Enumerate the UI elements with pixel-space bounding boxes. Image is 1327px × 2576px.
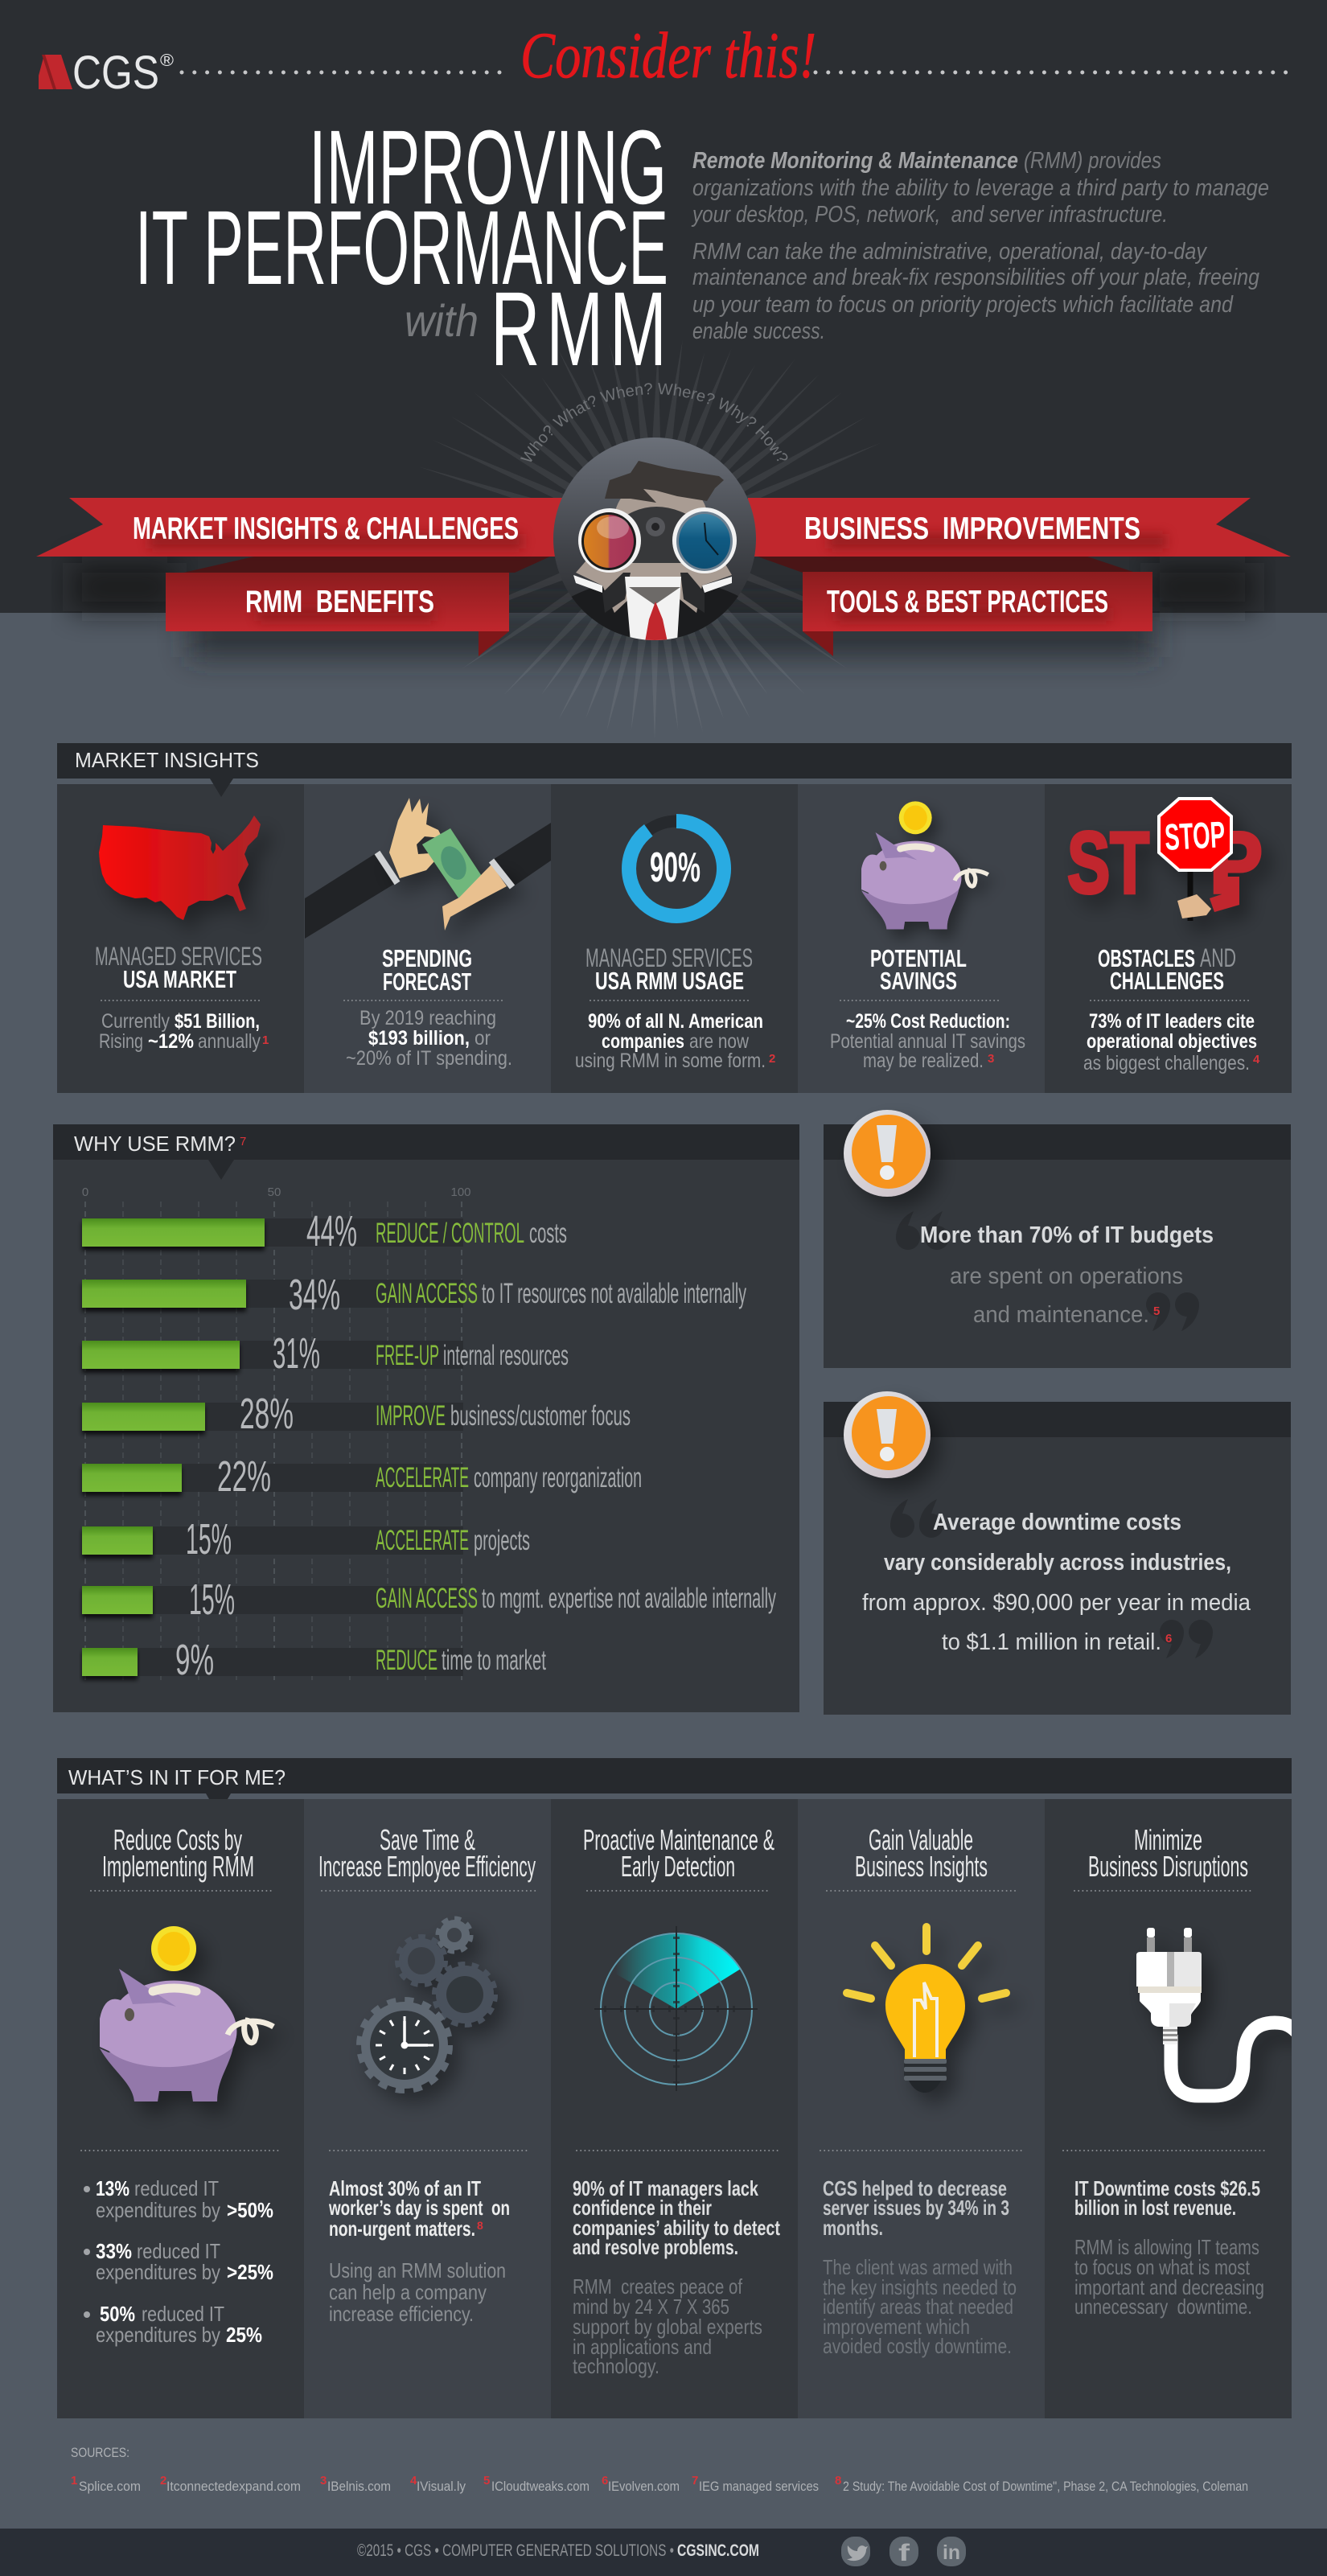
panel: why use RMM xyxy=(53,1124,799,1712)
text block: insights stats: server issues by 34% in 3 xyxy=(823,2196,1009,2220)
row: improve 28%: 28% xyxy=(240,1390,294,1438)
heading: gain insights xyxy=(827,1823,1015,1891)
text block: potential savings: 3 xyxy=(988,1052,994,1066)
icon: stop sign xyxy=(1067,799,1263,921)
text block: insights stats xyxy=(820,2151,1021,2358)
icon: hands exchanging money xyxy=(305,798,551,939)
text block: USA RMM usage xyxy=(575,943,775,1072)
text block: obstacles and challenges: 4 xyxy=(1253,1053,1260,1066)
heading: proactive maintenance: Early Detection xyxy=(621,1850,735,1883)
text block: managed services USA market: Rising xyxy=(99,1030,143,1053)
text block: save time stats: 8 xyxy=(477,2219,483,2232)
row: accelerate projects 15%: projects xyxy=(474,1525,530,1556)
row: gain access mgmt 15%: 15% xyxy=(189,1576,235,1624)
row: reduce costs 44% xyxy=(82,1207,567,1255)
text block: sources: 2 Study: The Avoidable Cost of Downtime", Phase 2, CA Technologies, Coleman xyxy=(843,2479,1248,2494)
row: free-up 31%: 31% xyxy=(273,1329,320,1378)
text block: sources: 1 xyxy=(71,2474,77,2488)
text block: managed services USA market: USA MARKET xyxy=(123,965,236,993)
heading: reduce costs: Implementing RMM xyxy=(102,1850,254,1883)
text block: save time stats: non-urgent matters. xyxy=(329,2217,475,2241)
callout: IT budgets xyxy=(824,1110,1291,1368)
text block: disruption stats: RMM is allowing IT teams xyxy=(1074,2235,1259,2259)
heading: reduce costs: Reduce Costs by xyxy=(113,1823,242,1856)
text block: spending forecast: $193 billion, xyxy=(368,1027,470,1050)
text block: sources: 5 xyxy=(483,2474,490,2488)
text block: obstacles and challenges: CHALLENGES xyxy=(1110,967,1224,995)
text block: reduce costs stats: expenditures by xyxy=(96,2260,220,2284)
icon: small piggy bank xyxy=(861,801,988,929)
text block: USA RMM usage: companies xyxy=(602,1030,684,1053)
title: with xyxy=(405,295,479,346)
row: reduce costs 44%: costs xyxy=(529,1218,567,1249)
icon: twitter xyxy=(841,2537,870,2566)
row: reduce time 9%: time to market xyxy=(442,1645,546,1676)
text block: proactive stats: technology. xyxy=(573,2354,659,2378)
text block: managed services USA market xyxy=(95,942,269,1053)
heading: minimize disruptions: Minimize xyxy=(1134,1823,1202,1856)
text block: potential savings xyxy=(830,944,1025,1072)
text block: sources: 8 xyxy=(835,2474,841,2488)
title xyxy=(135,108,673,388)
ribbon: RMM Benefits xyxy=(166,573,509,656)
text block: save time stats: worker’s day is spent on xyxy=(328,2196,510,2220)
heading: gain insights: Business Insights xyxy=(855,1850,988,1883)
text block: proactive stats: companies’ ability to detect xyxy=(573,2216,780,2240)
icon: stop sign: ST xyxy=(1067,814,1149,912)
heading: WHAT’S IN IT FOR ME? xyxy=(68,1765,286,1789)
logo: CGS: CGS xyxy=(72,47,159,99)
text block: reduce costs stats: >50% xyxy=(227,2198,273,2222)
quote text: More than 70% of IT budgets xyxy=(920,1222,1214,1248)
text block: obstacles and challenges xyxy=(1083,943,1260,1074)
text block: intro: up your team to focus on priority projects which facilitate and xyxy=(692,292,1234,318)
ribbon: Tools & Best Practices: TOOLS & BEST PRACTICES xyxy=(827,585,1108,619)
binoculars bridge xyxy=(627,507,688,563)
pointer xyxy=(210,779,233,797)
row: gain access 34%: to IT resources not available internally xyxy=(482,1278,746,1309)
heading: 7 xyxy=(240,1135,246,1148)
axis labels: 100 xyxy=(450,1185,471,1199)
row: reduce costs 44%: 44% xyxy=(306,1207,357,1255)
footer text: ©2015 • CGS • COMPUTER GENERATED SOLUTIONS • xyxy=(357,2541,674,2560)
row: gain access mgmt 15%: GAIN ACCESS xyxy=(376,1583,478,1614)
text block: save time stats: can help a company xyxy=(329,2280,487,2304)
row: accelerate projects 15% xyxy=(82,1515,530,1563)
row: free-up 31%: FREE-UP xyxy=(376,1340,439,1371)
chart: 90% ring xyxy=(629,821,724,916)
text block: intro: Remote Monitoring & Maintenance xyxy=(692,148,1018,174)
row: gain access mgmt 15%: to mgmt. expertise not available internally xyxy=(482,1583,776,1614)
pointer xyxy=(206,1793,231,1799)
icon: facebook xyxy=(889,2537,918,2566)
heading: minimize disruptions xyxy=(1074,1823,1253,1891)
text block: sources: 2 xyxy=(160,2474,166,2488)
text block: proactive stats: support by global experts xyxy=(573,2315,762,2339)
text block: USA RMM usage: are now xyxy=(689,1030,750,1053)
ribbon: Business Improvements: BUSINESS IMPROVEMENTS xyxy=(804,512,1140,546)
text block: potential savings: Potential annual IT savings xyxy=(830,1030,1025,1053)
text block: spending forecast xyxy=(344,944,512,1070)
quote text: to $1.1 million in retail. xyxy=(942,1629,1161,1655)
bar chart xyxy=(82,1185,776,1684)
text block: obstacles and challenges: as biggest challenges. xyxy=(1083,1052,1250,1074)
header bar xyxy=(57,743,1292,779)
quote text: vary considerably across industries, xyxy=(884,1550,1231,1576)
row: improve 28%: IMPROVE xyxy=(376,1400,446,1432)
callout: downtime costs xyxy=(824,1391,1291,1715)
section: market insights xyxy=(57,743,1292,1093)
text block: intro: RMM can take the administrative, operational, day-to-day xyxy=(692,239,1207,265)
icon: man with binoculars xyxy=(553,438,756,643)
text block: sources: IBelnis.com xyxy=(327,2479,391,2494)
tie xyxy=(645,602,668,642)
text block: USA RMM usage: 2 xyxy=(769,1052,775,1066)
text block: reduce costs stats: 25% xyxy=(226,2323,262,2347)
text block: save time stats: Almost 30% of an IT xyxy=(329,2176,481,2200)
icon: exclamation badge xyxy=(844,1110,931,1197)
ribbon: Market Insights & Challenges xyxy=(36,498,563,573)
icon: gears and clock xyxy=(360,1919,495,2089)
axis labels xyxy=(82,1185,471,1199)
row: reduce time 9% xyxy=(82,1636,546,1684)
text block: disruption stats: important and decreasing xyxy=(1074,2275,1264,2299)
footer bar xyxy=(0,2529,1327,2576)
text block: proactive stats: RMM creates peace of xyxy=(573,2274,743,2299)
shirt xyxy=(625,577,681,642)
section: what's in it for me xyxy=(57,1758,1292,2418)
heading: Consider this: Consider this! xyxy=(520,18,816,92)
text block: disruption stats xyxy=(1063,2151,1264,2319)
quote text: and maintenance. xyxy=(973,1302,1149,1328)
text block: reduce costs stats: 50% xyxy=(100,2302,135,2326)
text block: proactive stats xyxy=(573,2151,780,2378)
text block: sources: IEvolven.com xyxy=(608,2479,680,2494)
text block: reduce costs stats: reduced IT xyxy=(137,2239,220,2263)
icon: facebook: f xyxy=(898,2540,910,2566)
heading: save time: Save Time & xyxy=(380,1823,475,1856)
text block: spending forecast: SPENDING xyxy=(382,944,472,972)
row: reduce time 9%: 9% xyxy=(175,1636,214,1684)
text block: insights stats: CGS helped to decrease xyxy=(823,2176,1007,2200)
text block: disruption stats: IT Downtime costs $26.5 xyxy=(1074,2176,1260,2200)
text block: insights stats: The client was armed with xyxy=(823,2255,1013,2279)
text block: USA RMM usage: USA RMM USAGE xyxy=(595,967,744,995)
text block: reduce costs stats: 13% xyxy=(96,2176,129,2200)
heading: WHY USE RMM? xyxy=(74,1132,236,1156)
footer text: CGSINC.COM xyxy=(677,2541,759,2560)
text block: sources xyxy=(71,2445,1248,2494)
text block: reduce costs stats: reduced IT xyxy=(142,2302,224,2326)
text block: managed services USA market: Currently xyxy=(101,1010,170,1033)
lens right xyxy=(672,507,737,573)
text block: sources: 6 xyxy=(602,2474,608,2488)
icon: power plug xyxy=(1136,1928,1296,2096)
lens left xyxy=(578,508,641,573)
text block: USA RMM usage: 90% of all N. American xyxy=(588,1010,763,1033)
text block: reduce costs stats xyxy=(81,2151,281,2347)
quote text xyxy=(862,1510,1251,1655)
row: accelerate projects 15%: ACCELERATE xyxy=(376,1525,469,1556)
axis labels: 0 xyxy=(82,1185,88,1199)
ribbon: RMM Benefits: RMM BENEFITS xyxy=(245,585,434,619)
heading: proactive maintenance: Proactive Maintenance & xyxy=(583,1823,774,1856)
text block: managed services USA market: $51 Billion, xyxy=(175,1010,260,1033)
heading: MARKET INSIGHTS xyxy=(75,748,259,772)
text block: obstacles and challenges: 73% of IT leaders cite xyxy=(1089,1010,1255,1033)
quote text: 5 xyxy=(1153,1304,1160,1318)
text block: intro: (RMM) provides xyxy=(1024,148,1161,174)
quote text: from approx. $90,000 per year in media xyxy=(862,1590,1251,1616)
icon: stop sign: STOP xyxy=(1164,813,1226,858)
text block: disruption stats: billion in lost revenue. xyxy=(1074,2196,1236,2220)
row: free-up 31% xyxy=(82,1329,569,1378)
row: accelerate reorganization 22% xyxy=(82,1452,642,1501)
axis labels: 50 xyxy=(268,1185,281,1199)
logo: CGS: ® xyxy=(160,51,175,70)
text block: proactive stats: mind by 24 X 7 X 365 xyxy=(573,2295,729,2319)
text block: obstacles and challenges: operational objectives xyxy=(1087,1030,1257,1053)
row: accelerate reorganization 22%: ACCELERATE xyxy=(376,1462,469,1493)
ribbon: Tools & Best Practices xyxy=(803,572,1152,656)
icon: piggy bank xyxy=(100,1926,273,2101)
text block: reduce costs stats: expenditures by xyxy=(96,2198,220,2222)
text block: disruption stats: unnecessary downtime. xyxy=(1074,2295,1252,2319)
quote marks xyxy=(896,1211,1199,1331)
quote text: Average downtime costs xyxy=(933,1510,1181,1535)
text block: sources: 7 xyxy=(692,2474,698,2488)
ribbon: Market Insights & Challenges: MARKET INSIGHTS & CHALLENGES xyxy=(133,512,519,546)
sunburst rays xyxy=(418,339,885,740)
text block: proactive stats: 90% of IT managers lack xyxy=(573,2176,758,2200)
text block: save time stats xyxy=(328,2151,529,2326)
text block: USA RMM usage: using RMM in some form. xyxy=(575,1050,766,1072)
row: accelerate projects 15%: 15% xyxy=(186,1515,232,1563)
title: IT PERFORMANCE xyxy=(135,188,668,306)
panel backgrounds xyxy=(57,1799,1292,2418)
text block: spending forecast: FORECAST xyxy=(383,968,471,996)
face xyxy=(616,489,706,515)
row: gain access mgmt 15% xyxy=(82,1576,776,1624)
text block: reduce costs stats: reduced IT xyxy=(134,2176,219,2200)
text block: spending forecast: By 2019 reaching xyxy=(359,1007,496,1029)
text block: insights stats: avoided costly downtime. xyxy=(823,2334,1012,2358)
text block: insights stats: the key insights needed to xyxy=(823,2275,1017,2299)
title: IMPROVING xyxy=(309,108,667,226)
text block: spending forecast: ~20% of IT spending. xyxy=(346,1047,512,1070)
text block: USA RMM usage: MANAGED SERVICES xyxy=(585,943,753,972)
row: accelerate reorganization 22%: 22% xyxy=(217,1452,271,1501)
text block: intro xyxy=(691,148,1269,344)
text block: spending forecast: or xyxy=(475,1027,491,1050)
icon: linkedin: in xyxy=(943,2541,960,2564)
row: free-up 31%: internal resources xyxy=(443,1340,569,1371)
text block: insights stats: months. xyxy=(823,2216,883,2240)
row: accelerate reorganization 22%: company reorganization xyxy=(474,1462,642,1493)
text block: save time stats: Using an RMM solution xyxy=(329,2258,506,2282)
icon: exclamation badge xyxy=(844,1391,931,1478)
text block: sources: SOURCES: xyxy=(71,2445,129,2460)
ribbon: Business Improvements xyxy=(748,498,1291,573)
row: gain access 34%: GAIN ACCESS xyxy=(376,1278,478,1309)
text block: proactive stats: in applications and xyxy=(573,2335,712,2359)
heading: save time: Increase Employee Efficiency xyxy=(318,1850,536,1883)
question words arc: Who? What? When? Where? Why? How? xyxy=(520,383,788,462)
text block: save time stats: increase efficiency. xyxy=(329,2302,474,2326)
text block: obstacles and challenges: OBSTACLES xyxy=(1098,944,1195,972)
text block: sources: IVisual.ly xyxy=(417,2479,466,2494)
quote marks xyxy=(890,1499,1213,1658)
text block: sources: IEG managed services xyxy=(699,2479,819,2494)
text block: managed services USA market: ~12% xyxy=(148,1030,194,1053)
icon: light bulb xyxy=(847,1927,1006,2093)
row: gain access 34% xyxy=(82,1271,746,1319)
heading: gain insights: Gain Valuable xyxy=(869,1823,973,1856)
icon: USA map xyxy=(99,816,261,920)
row: reduce time 9%: REDUCE xyxy=(376,1645,438,1676)
text block: sources: 4 xyxy=(410,2474,417,2488)
text block: potential savings: POTENTIAL xyxy=(870,944,967,972)
text block: reduce costs stats: >25% xyxy=(227,2260,273,2284)
pointer xyxy=(208,1160,234,1180)
icon: stop sign: P xyxy=(1210,814,1263,912)
text block: obstacles and challenges: AND xyxy=(1200,943,1236,972)
text block: potential savings: may be realized. xyxy=(863,1050,984,1072)
ribbon shadows xyxy=(72,563,1255,657)
text block: managed services USA market: MANAGED SERVICES xyxy=(95,942,262,971)
text block: sources: ICloudtweaks.com xyxy=(491,2479,590,2494)
quote text: 6 xyxy=(1165,1632,1172,1645)
text block: disruption stats: to focus on what is most xyxy=(1074,2255,1251,2279)
hair xyxy=(605,461,724,503)
quote text xyxy=(920,1222,1214,1328)
quote text: are spent on operations xyxy=(950,1263,1183,1289)
heading: reduce costs xyxy=(91,1823,273,1891)
row: gain access 34%: 34% xyxy=(289,1271,340,1319)
suit xyxy=(571,584,738,638)
text block: managed services USA market: 1 xyxy=(262,1033,269,1047)
row: improve 28%: business/customer focus xyxy=(450,1400,631,1432)
text block: proactive stats: confidence in their xyxy=(573,2196,712,2220)
text block: reduce costs stats: expenditures by xyxy=(96,2323,220,2347)
text block: sources: Itconnectedexpand.com xyxy=(166,2479,301,2494)
row: reduce costs 44%: REDUCE / CONTROL xyxy=(376,1218,524,1249)
icon: radar xyxy=(594,1926,758,2091)
text block: potential savings: ~25% Cost Reduction: xyxy=(846,1010,1010,1033)
chart: 90% ring: 90% xyxy=(650,844,700,891)
text block: sources: Splice.com xyxy=(79,2479,141,2494)
heading: save time xyxy=(318,1823,537,1891)
title: RMM xyxy=(491,271,673,388)
text block: intro: your desktop, POS, network, and server infrastructure. xyxy=(691,202,1168,228)
panel: header background xyxy=(0,0,1327,613)
text block: potential savings: SAVINGS xyxy=(880,967,957,995)
row: improve 28% xyxy=(82,1390,631,1438)
heading: proactive maintenance xyxy=(583,1823,774,1891)
text block: insights stats: improvement which xyxy=(823,2315,970,2339)
text block: reduce costs stats: 33% xyxy=(96,2239,132,2263)
icon: linkedin xyxy=(937,2537,966,2566)
text block: sources: 3 xyxy=(320,2474,327,2488)
text block: managed services USA market: annually xyxy=(198,1030,261,1053)
text block: insights stats: identify areas that needed xyxy=(823,2295,1013,2319)
panel backgrounds xyxy=(57,784,1292,1093)
header bar xyxy=(57,1758,1292,1793)
cuffs and sleeves xyxy=(573,575,602,593)
text block: proactive stats: and resolve problems. xyxy=(573,2235,738,2259)
text block: intro: enable success. xyxy=(692,318,825,344)
